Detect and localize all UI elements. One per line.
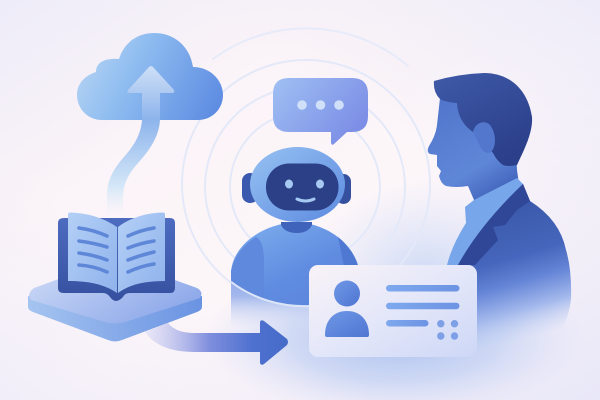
robot: [231, 147, 358, 330]
robot head: [250, 147, 345, 222]
robot right ear: [336, 174, 351, 204]
robot eyes: [285, 180, 324, 188]
arrow: knowledge to profile card: [145, 320, 288, 365]
right page: [118, 212, 165, 293]
profile text lines: [386, 285, 460, 326]
ring over body: [231, 282, 310, 306]
person silhouette: [428, 73, 571, 350]
profile card: [309, 265, 477, 357]
platform: [28, 260, 202, 342]
icon: open book: [58, 212, 175, 301]
robot lower body fade: [231, 270, 358, 328]
left page: [68, 212, 117, 293]
typing dots: [297, 100, 344, 110]
hair: [434, 73, 532, 166]
icon: avatar: [325, 280, 369, 337]
robot left ear: [242, 173, 258, 203]
speech bubble: [273, 78, 368, 145]
arrow: knowledge up to cloud: [107, 66, 174, 214]
robot neck: [281, 222, 312, 233]
shirt collar: [447, 178, 523, 265]
suit lapel: [458, 184, 530, 265]
book cover: [58, 218, 175, 301]
robot body: [231, 224, 358, 306]
card dots: [437, 320, 458, 340]
concentric signal rings: [182, 28, 430, 308]
robot face: [266, 164, 338, 210]
icon: cloud: [77, 33, 223, 120]
robot smile: [297, 199, 314, 201]
robot right shoulder: [338, 237, 358, 266]
ear: [473, 122, 495, 153]
robot arm shading: [231, 237, 264, 294]
suit: [458, 184, 571, 350]
face and neck: [428, 98, 520, 212]
page text lines: [79, 228, 154, 272]
